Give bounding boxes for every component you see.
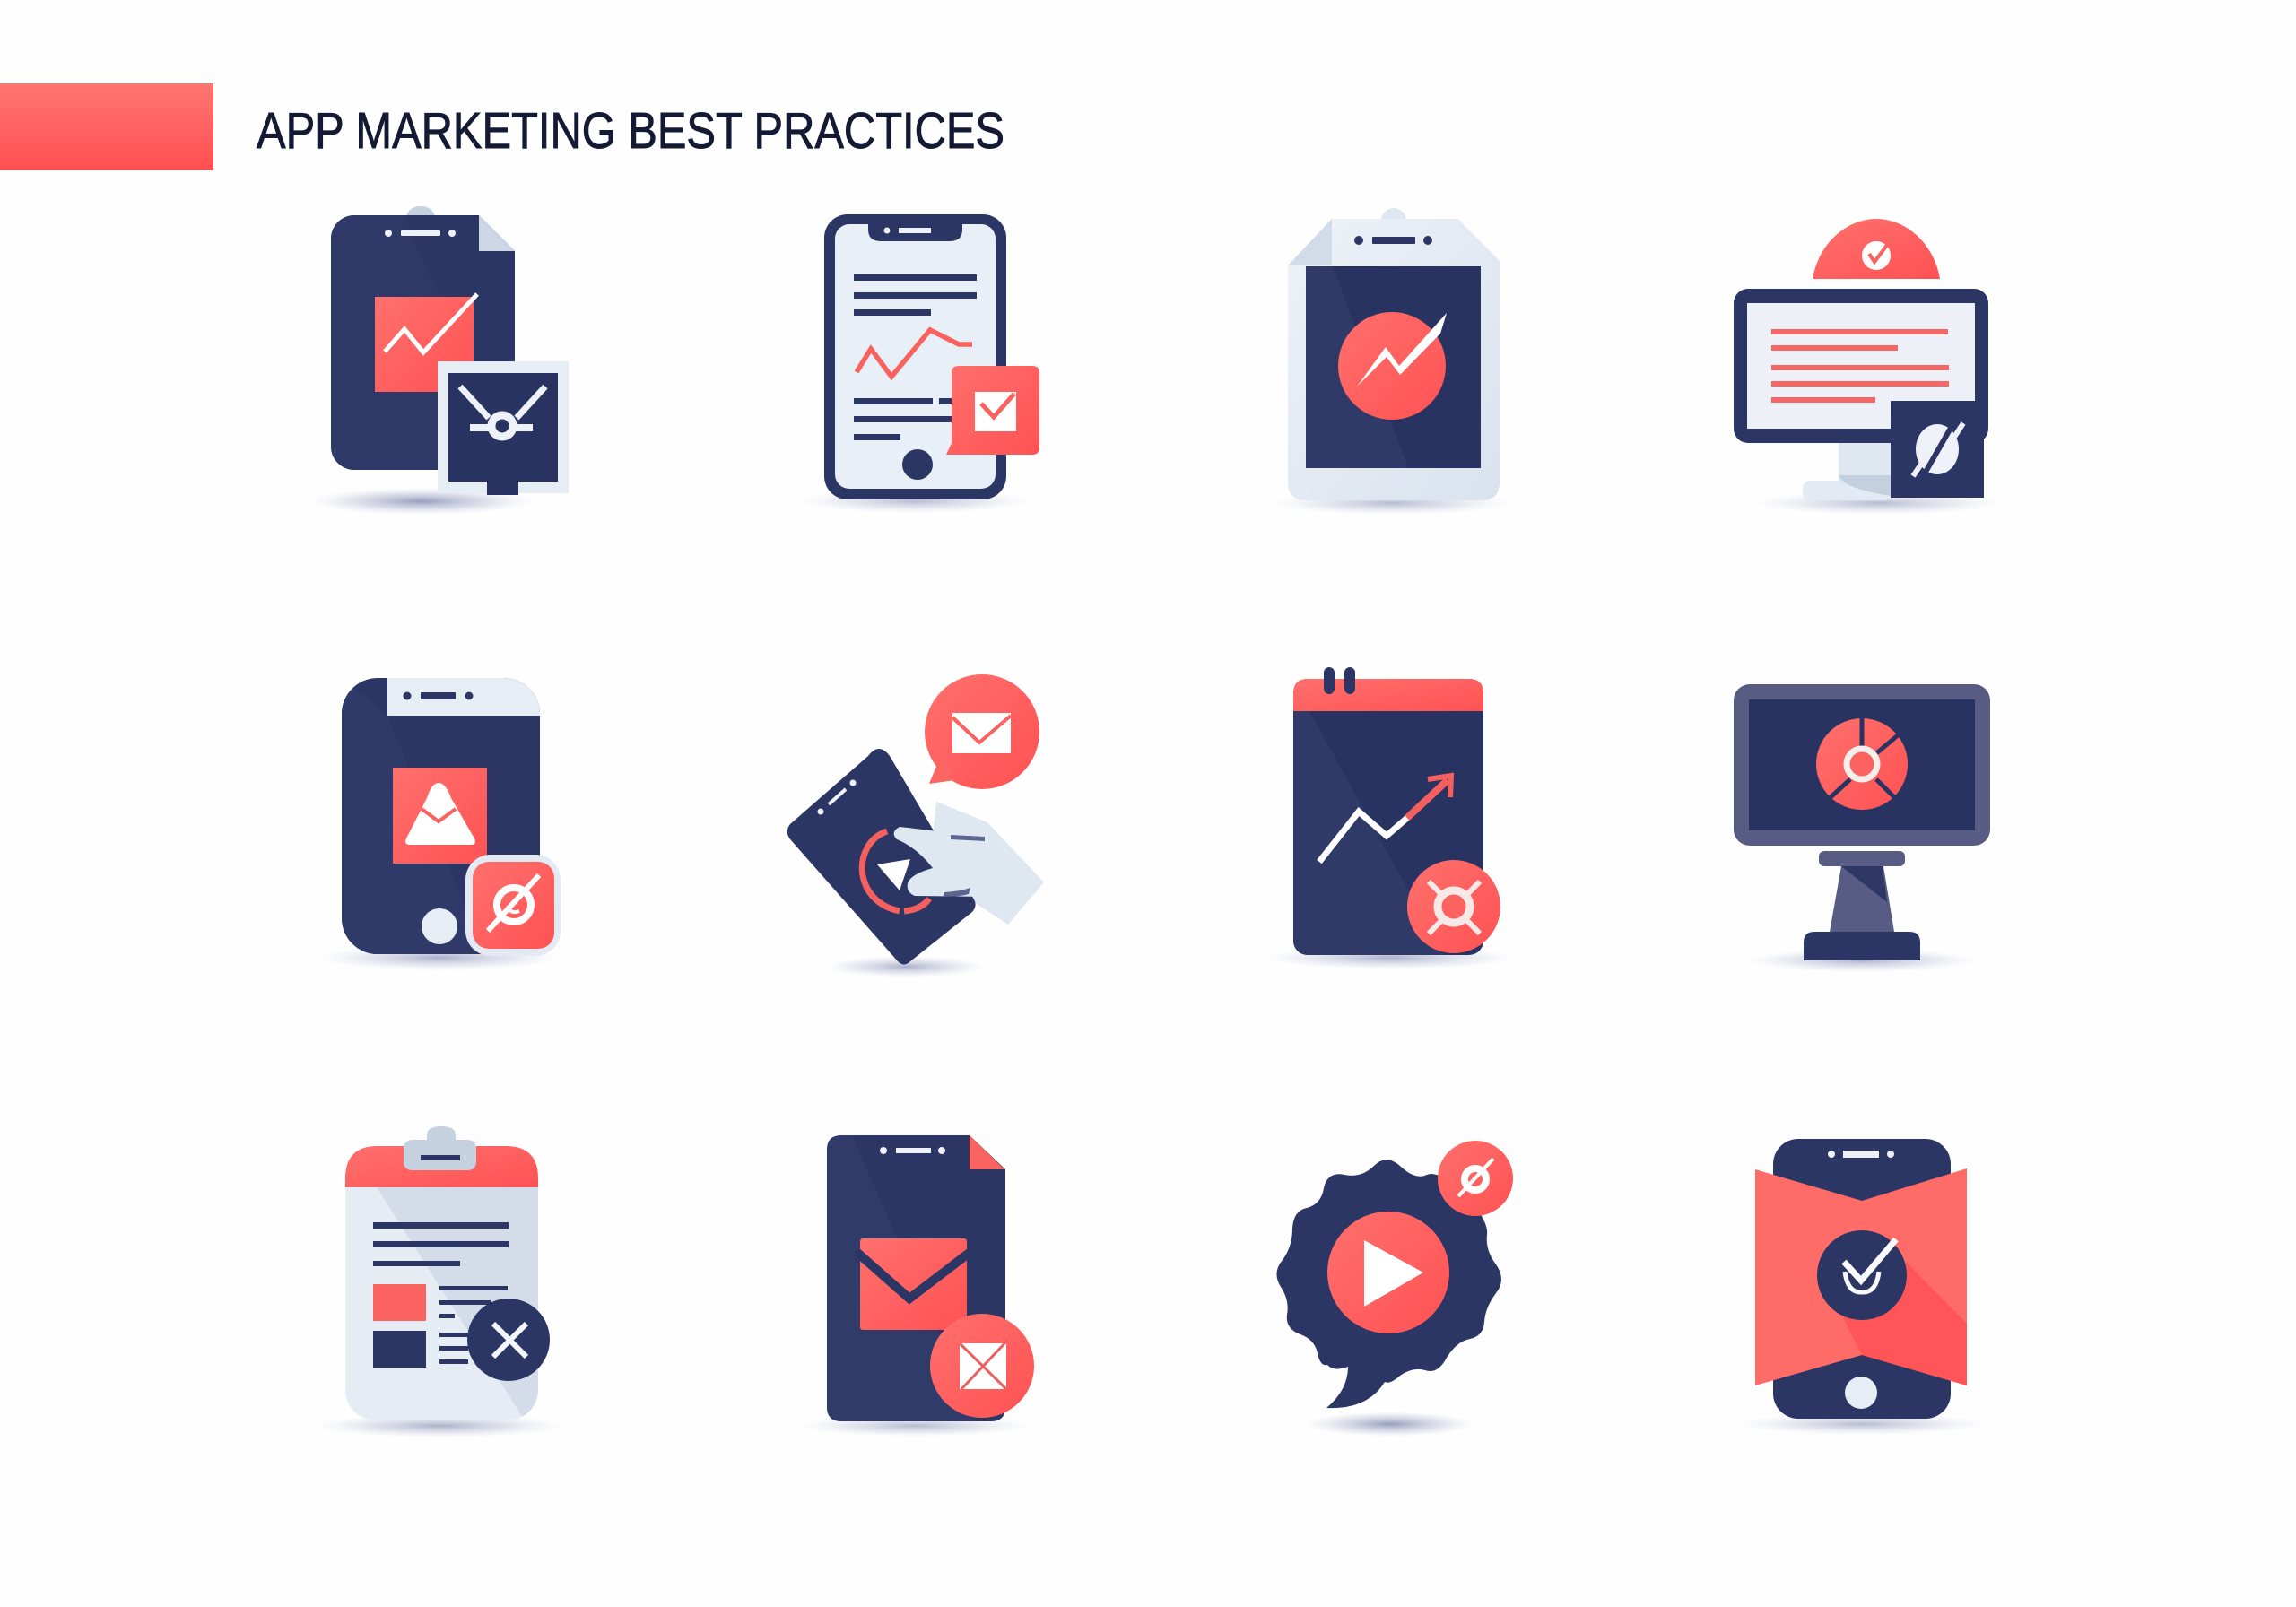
facet <box>377 1187 538 1420</box>
dome <box>1813 219 1940 279</box>
mountain tile <box>393 768 487 864</box>
check mark <box>1844 1239 1896 1292</box>
icon 8: monitor with pie chart <box>1734 684 1990 972</box>
plug symbol <box>1913 423 1963 476</box>
badge <box>465 855 561 956</box>
growth zigzag <box>1357 313 1447 387</box>
speaker <box>884 228 931 233</box>
ribbon <box>1755 1168 1967 1385</box>
roof facet <box>1288 219 1332 265</box>
screen <box>1749 699 1975 830</box>
envelope <box>952 713 1011 753</box>
board <box>345 1146 538 1420</box>
envelope fold <box>857 1252 970 1299</box>
white trend <box>1319 812 1407 862</box>
hand back <box>933 802 1044 925</box>
side lines <box>439 1286 508 1364</box>
badge inner <box>473 862 554 949</box>
red header <box>345 1146 538 1187</box>
facet <box>342 687 377 954</box>
header banner <box>0 83 213 170</box>
shadow <box>1736 1413 1987 1435</box>
check circle <box>1817 1230 1907 1320</box>
badge symbol <box>1429 882 1480 934</box>
close x <box>493 1324 526 1357</box>
shadow <box>1745 949 1979 972</box>
icon 5: phone with mountain tile and target badge <box>318 678 561 970</box>
tilted phone <box>787 749 976 965</box>
red header <box>1293 679 1483 711</box>
small card <box>438 361 569 495</box>
fingers and palm <box>894 827 994 897</box>
icon 7: calendar phone with trend arrow and badge <box>1285 667 1500 968</box>
monitor frame <box>1734 684 1990 846</box>
notch <box>868 224 962 241</box>
screen <box>1747 303 1975 429</box>
facet <box>827 1135 841 1421</box>
scalloped bubble <box>1276 1160 1501 1408</box>
centre ring <box>1847 749 1877 779</box>
badge <box>930 1314 1034 1418</box>
icon 2: phone with document and mail badge <box>798 214 1039 513</box>
phone body <box>342 678 540 954</box>
body <box>1293 679 1483 955</box>
clip <box>404 1126 476 1170</box>
phone frame <box>824 214 1006 499</box>
speaker <box>404 692 474 699</box>
text lines <box>1771 329 1949 403</box>
play triangle <box>877 859 910 890</box>
chart line <box>857 330 972 377</box>
icon 10: phone with envelope and badge <box>798 1135 1034 1437</box>
mail badge <box>946 366 1039 455</box>
chart line <box>385 294 477 352</box>
home button <box>422 908 457 944</box>
body <box>827 1135 1005 1421</box>
home button <box>1845 1377 1877 1409</box>
envelope <box>860 1238 967 1330</box>
icon 3: light phone with growth circle <box>1288 208 1500 513</box>
phone body <box>1773 1139 1951 1419</box>
title: APP MARKETING BEST PRACTICES <box>257 102 1004 160</box>
stand <box>1830 866 1894 932</box>
speaker <box>385 230 456 237</box>
icon 6: hand on tilted phone with mail bubble <box>787 674 1044 977</box>
badge check <box>981 394 1014 417</box>
home button <box>902 449 933 480</box>
speaker <box>880 1147 945 1154</box>
shadow <box>1753 491 2005 515</box>
red circle <box>1338 312 1446 420</box>
badge x <box>960 1340 1008 1389</box>
shadow <box>1271 491 1513 515</box>
navy thumbnail <box>373 1331 426 1368</box>
progress ring <box>862 831 900 911</box>
navy card <box>1891 401 1984 498</box>
icon 9: clipboard with close badge <box>335 1126 550 1436</box>
small badge <box>1438 1141 1513 1216</box>
shadow <box>318 945 561 970</box>
knob <box>1381 208 1406 235</box>
envelope flap <box>952 716 1011 743</box>
ring segment <box>904 899 929 911</box>
dog ear <box>479 215 515 251</box>
lower lines <box>854 398 955 440</box>
shadow <box>798 490 1031 513</box>
screen <box>835 224 996 489</box>
shadow <box>314 1414 565 1438</box>
chart tile <box>375 297 474 392</box>
dome check badge <box>1862 237 1893 270</box>
red thumbnail <box>373 1284 426 1321</box>
body <box>1288 219 1500 500</box>
icon 11: scalloped speech bubble with play button <box>1276 1141 1513 1437</box>
mountain <box>405 783 475 845</box>
clip knob <box>406 206 435 230</box>
badge envelope <box>975 392 1016 431</box>
dog ear <box>970 1135 1004 1169</box>
speaker <box>818 780 856 814</box>
close badge <box>467 1299 550 1381</box>
stand cap <box>1819 851 1905 866</box>
facet <box>1293 942 1308 955</box>
red arrow <box>1407 776 1451 818</box>
speaker <box>1354 236 1432 245</box>
binder rings <box>1324 667 1355 694</box>
mail bubble <box>925 674 1039 789</box>
ribbon facet <box>1843 1262 1967 1385</box>
icon 1: phone with chart and gauge card <box>309 206 569 515</box>
badge sheet <box>960 1343 1006 1389</box>
monitor frame <box>1734 289 1988 443</box>
shadow <box>1265 946 1516 969</box>
phone body <box>331 215 515 470</box>
shadow <box>309 488 534 515</box>
icon 12: phone with red ribbon and check <box>1736 1139 1987 1435</box>
pie <box>1816 718 1908 810</box>
pie dividers <box>1830 718 1898 798</box>
clip slot <box>421 1155 460 1160</box>
target <box>1458 1159 1493 1196</box>
stand <box>1803 439 1892 500</box>
shadow <box>1305 1412 1475 1437</box>
facet <box>331 215 353 470</box>
screen <box>1306 266 1481 468</box>
play circle <box>1327 1212 1449 1333</box>
screen facet <box>1306 266 1408 468</box>
header <box>387 678 540 716</box>
play triangle <box>1364 1240 1423 1307</box>
speaker <box>1828 1151 1894 1158</box>
shadow <box>798 1415 1031 1437</box>
badge <box>1407 860 1500 953</box>
text lines <box>854 274 977 316</box>
text lines <box>373 1222 509 1266</box>
base <box>1804 932 1920 960</box>
target <box>488 875 539 931</box>
icon 4: monitor with dome and plug card <box>1734 219 2005 515</box>
shadow <box>825 956 987 977</box>
stand facet <box>1841 866 1887 902</box>
